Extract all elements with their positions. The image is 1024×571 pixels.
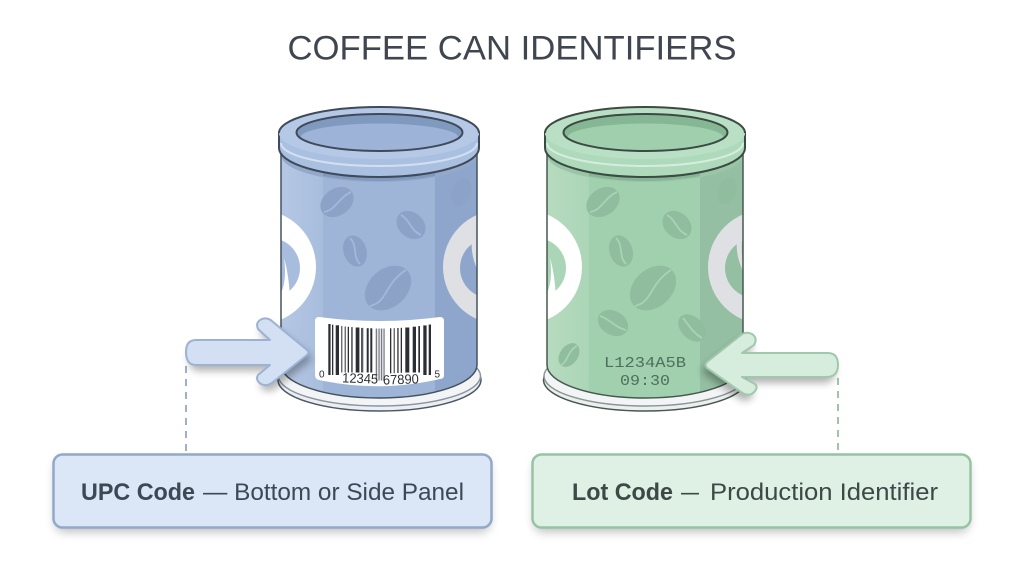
callout: UPC code: — Bottom or Side Panel bbox=[203, 479, 464, 506]
grey medallion bbox=[443, 215, 476, 319]
callout: UPC code bbox=[54, 454, 492, 532]
arrow: Lot bbox=[702, 333, 838, 401]
can body bbox=[546, 154, 744, 399]
callout: Lot code: — bbox=[681, 479, 699, 506]
infographic canvas bbox=[50, 36, 974, 538]
blue coffee can bbox=[277, 106, 482, 412]
lot code print bbox=[604, 355, 686, 390]
bean creases bbox=[561, 192, 702, 365]
white medallion bbox=[282, 214, 316, 320]
barcode digits: 0 bbox=[319, 370, 325, 380]
can base rings bbox=[278, 346, 481, 411]
green coffee can bbox=[542, 106, 747, 412]
dashed connector: Lot bbox=[837, 378, 839, 454]
rim cast shadow bbox=[282, 156, 435, 182]
white medallion bbox=[548, 214, 582, 320]
arrow: UPC bbox=[186, 318, 312, 391]
grey medallion bbox=[708, 214, 742, 320]
lot code print: L1234A5B bbox=[604, 355, 686, 372]
lot code print: 09:30 bbox=[620, 373, 670, 390]
can base rings bbox=[544, 346, 746, 411]
barcode bars bbox=[328, 324, 431, 380]
callout: UPC code: UPC Code bbox=[81, 479, 195, 506]
rim bbox=[279, 107, 479, 177]
callout: Lot code bbox=[532, 454, 970, 532]
rim bbox=[545, 107, 745, 177]
barcode digits bbox=[319, 370, 440, 388]
coffee beans bbox=[558, 187, 700, 367]
callout: Lot code: Production Identifier bbox=[710, 479, 938, 506]
barcode digits: 12345 bbox=[342, 370, 378, 387]
dashed connector: UPC bbox=[185, 366, 187, 454]
coffee beans bbox=[320, 187, 426, 310]
barcode label bbox=[315, 317, 444, 388]
barcode digits: 67890 bbox=[383, 371, 419, 388]
callout: Lot code: Lot Code bbox=[572, 479, 673, 506]
rim cast shadow bbox=[548, 156, 700, 182]
barcode digits: 5 bbox=[434, 370, 440, 380]
bean creases bbox=[324, 192, 421, 306]
title: COFFEE CAN IDENTIFIERS bbox=[288, 30, 736, 68]
can body bbox=[280, 154, 478, 399]
